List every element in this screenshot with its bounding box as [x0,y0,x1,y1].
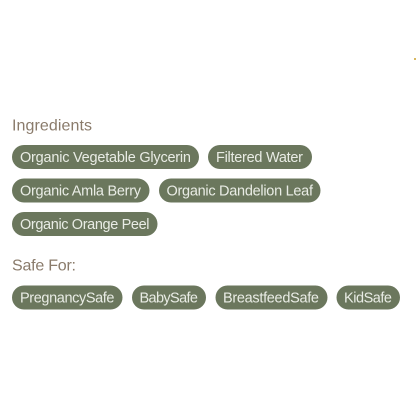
tag: BreastfeedSafe [216,286,328,310]
corner speck [414,58,416,60]
tag: Organic Dandelion Leaf: Organic Dandelion Leaf [166,184,314,200]
safety tags [12,286,400,310]
tag: Organic Amla Berry: Organic Amla Berry [20,184,142,200]
tag: PregnancySafe: PregnancySafe [20,290,114,306]
tag: Filtered Water [208,145,312,169]
heading: Ingredients: Ingredients [12,118,92,134]
tag: Organic Orange Peel: Organic Orange Peel [20,217,150,233]
tag: BabySafe [132,286,206,310]
tag: PregnancySafe [12,286,122,310]
tag: Organic Dandelion Leaf [159,178,320,202]
tag: Organic Vegetable Glycerin [12,145,199,169]
tag: Organic Vegetable Glycerin: Organic Vegetable Glycerin [20,150,191,166]
tag: BabySafe: BabySafe [140,290,198,306]
tag: BreastfeedSafe: BreastfeedSafe [223,290,319,306]
tag: Organic Amla Berry [12,178,150,202]
heading: Safe For: Safe For: [12,258,76,274]
tag: Organic Orange Peel [12,212,158,236]
tag: Filtered Water: Filtered Water [216,150,303,166]
tag: KidSafe [336,286,400,310]
tag: KidSafe: KidSafe [344,290,392,306]
ingredient tags [12,145,320,236]
